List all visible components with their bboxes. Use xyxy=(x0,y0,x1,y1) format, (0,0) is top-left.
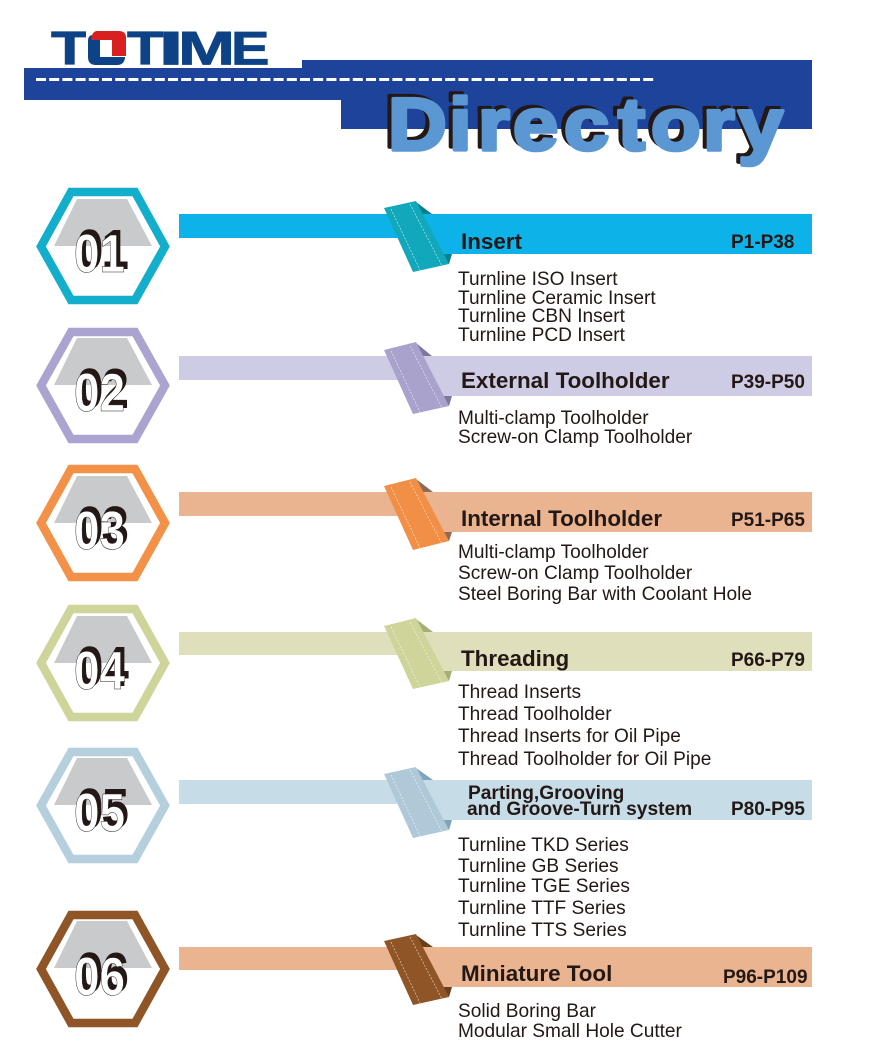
band xyxy=(179,947,812,987)
item list: Screw-on Clamp Toolholder xyxy=(458,563,693,584)
hexagon badge 06: 06 xyxy=(74,947,125,1007)
section 06: Miniature Tool xyxy=(41,915,812,1042)
logo: TOTIME: I xyxy=(158,23,184,76)
section 03: Internal Toolholder xyxy=(41,469,812,605)
heading: External Toolholder xyxy=(461,368,670,393)
hexagon badge 02: 02 xyxy=(74,363,125,423)
item list: Turnline TTS Series xyxy=(458,920,627,941)
item list: Turnline TGE Series xyxy=(458,876,630,897)
hexagon badge 03 xyxy=(41,469,165,577)
ribbon fold xyxy=(384,767,452,838)
heading: Parting,Grooving xyxy=(468,783,624,804)
hexagon badge 03: 03 xyxy=(77,497,128,557)
item list xyxy=(458,542,752,605)
hexagon badge 01 xyxy=(41,192,165,300)
item list: Solid Boring Bar xyxy=(458,1001,597,1022)
item list xyxy=(458,269,656,346)
section 01: Insert xyxy=(41,192,812,346)
ribbon fold xyxy=(384,934,452,1005)
band xyxy=(179,492,812,532)
hexagon badge 06: 06 xyxy=(77,943,128,1003)
item list: Steel Boring Bar with Coolant Hole xyxy=(458,584,752,605)
item list xyxy=(458,682,711,770)
logo: TOTIME: T xyxy=(127,23,164,76)
item list: Screw-on Clamp Toolholder xyxy=(458,427,693,448)
item list: Turnline TTF Series xyxy=(458,898,626,919)
page range: P51-P65 xyxy=(731,510,805,531)
heading: Miniature Tool xyxy=(461,961,612,986)
item list: Modular Small Hole Cutter xyxy=(458,1021,683,1042)
page range: P39-P50 xyxy=(731,372,805,393)
hexagon badge 03: 03 xyxy=(74,501,125,561)
logo: TOTIME xyxy=(51,23,270,76)
title: Directory: Directory xyxy=(388,84,783,166)
header banner xyxy=(24,60,812,129)
page range: P1-P38 xyxy=(731,232,794,253)
item list xyxy=(458,1001,683,1042)
item list: Thread Inserts xyxy=(458,682,581,703)
hexagon badge 02: 02 xyxy=(77,359,128,419)
item list: Multi-clamp Toolholder xyxy=(458,542,649,563)
item list: Turnline CBN Insert xyxy=(458,306,626,327)
page range: P66-P79 xyxy=(731,650,805,671)
band xyxy=(179,214,812,254)
section 04: Threading xyxy=(41,609,812,770)
item list: Turnline TKD Series xyxy=(458,835,629,856)
band xyxy=(179,356,812,396)
hexagon badge 04 xyxy=(41,609,165,717)
item list: Turnline GB Series xyxy=(458,856,619,877)
band xyxy=(179,632,812,671)
logo: TOTIME: M xyxy=(178,23,235,76)
hexagon badge 01: 01 xyxy=(77,220,128,280)
logo: TOTIME: T xyxy=(51,23,88,76)
heading: Insert xyxy=(461,229,523,254)
heading: and Groove-Turn system xyxy=(467,799,692,820)
page range: P96-P109 xyxy=(723,967,808,988)
heading: Internal Toolholder xyxy=(461,506,662,531)
item list: Turnline ISO Insert xyxy=(458,269,618,290)
hexagon badge 04: 04 xyxy=(77,637,128,697)
item list xyxy=(458,408,693,448)
item list: Thread Toolholder xyxy=(458,704,612,725)
hexagon badge 05: 05 xyxy=(74,783,125,843)
hexagon badge 04: 04 xyxy=(74,641,125,701)
section 05: Parting, Grooving and Groove-Turn system xyxy=(41,752,812,941)
page range: P80-P95 xyxy=(731,799,805,820)
ribbon fold xyxy=(384,618,452,689)
item list: Turnline Ceramic Insert xyxy=(458,288,656,309)
section 02: External Toolholder xyxy=(41,332,812,448)
hexagon badge 02 xyxy=(41,332,165,439)
item list: Multi-clamp Toolholder xyxy=(458,408,649,429)
item list xyxy=(458,835,630,941)
item list: Turnline PCD Insert xyxy=(458,325,626,346)
hexagon badge 06 xyxy=(41,915,165,1023)
ribbon fold xyxy=(384,478,452,550)
ribbon fold xyxy=(384,342,452,414)
band xyxy=(179,780,812,820)
logo: TOTIME: O xyxy=(88,23,126,76)
logo: TOTIME: E xyxy=(231,23,270,76)
item list: Thread Toolholder for Oil Pipe xyxy=(458,749,711,770)
title: Directory: Directory xyxy=(384,81,779,163)
heading xyxy=(467,783,692,820)
hexagon badge 05 xyxy=(41,752,165,859)
ribbon fold xyxy=(384,201,452,272)
hexagon badge 01: 01 xyxy=(74,224,125,284)
heading: Threading xyxy=(461,646,569,671)
item list: Thread Inserts for Oil Pipe xyxy=(458,726,681,747)
hexagon badge 05: 05 xyxy=(77,779,128,839)
